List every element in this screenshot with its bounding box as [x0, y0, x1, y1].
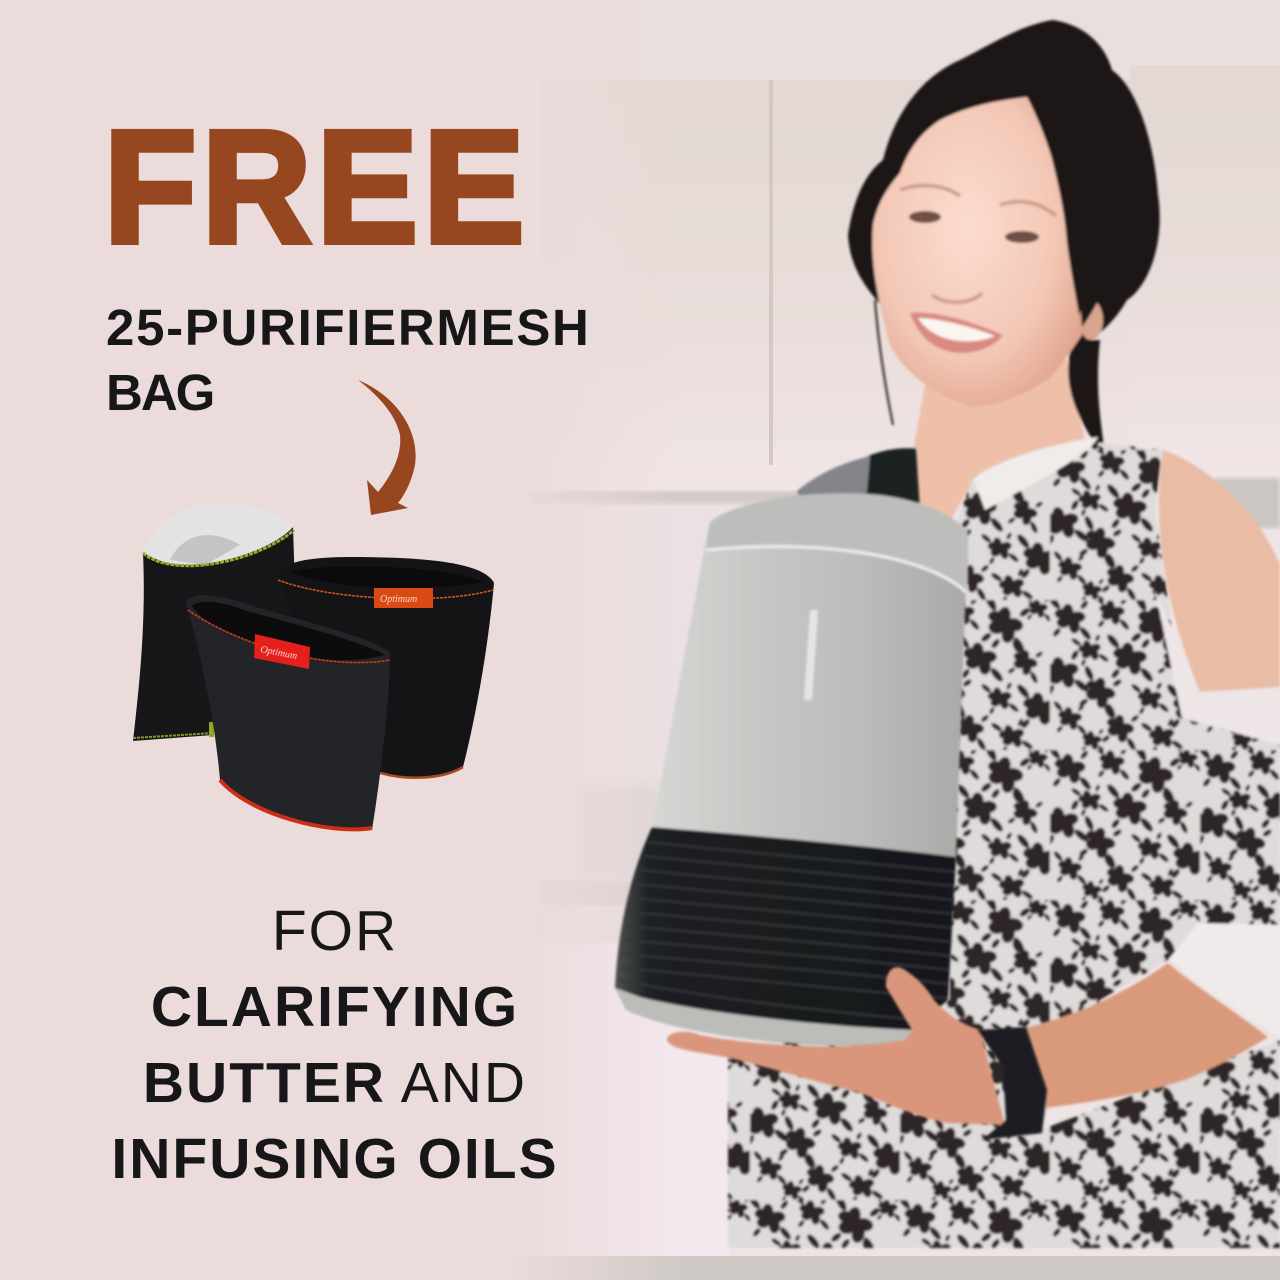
face: [872, 97, 1082, 407]
hair back: [848, 20, 1160, 350]
ribs: [618, 842, 955, 1020]
lid: [706, 493, 968, 592]
base bottom: [615, 988, 912, 1047]
side fringe: [1027, 97, 1115, 327]
subheading: product name: BAG: [106, 364, 213, 421]
subheading: product name: 25-PURIFIERMESH: [106, 299, 591, 356]
nose: [932, 293, 982, 302]
hand and watch: [667, 967, 1047, 1140]
ribbed base: [615, 827, 956, 1030]
green-stitched bag: [133, 503, 296, 741]
front red-stitched bag: [186, 595, 390, 831]
shoulder lace: [1155, 590, 1280, 745]
loose strand left: [875, 300, 893, 425]
forearm: [1025, 963, 1268, 1108]
body: [652, 530, 968, 857]
large orange-stitched bag: Optimum: [380, 594, 417, 605]
text block: usage: INFUSING OILS: [111, 1127, 559, 1191]
large orange-stitched bag: [278, 557, 494, 778]
person: [728, 20, 1280, 1248]
ear: [1079, 300, 1103, 340]
front red-stitched bag: Optimum: [259, 644, 298, 662]
subheading: product name: [106, 299, 591, 421]
bare shoulder: [1159, 450, 1280, 692]
product: mesh bags: [132, 504, 494, 832]
title: FREE: FREE: [104, 97, 530, 276]
purifier: [615, 448, 968, 1047]
text block: usage: BUTTER AND: [143, 1051, 527, 1115]
neck: [905, 360, 1085, 530]
kitchen background: [430, 0, 1280, 1280]
shine: [804, 610, 818, 700]
eyebrows: [900, 185, 1056, 216]
arrow: pointing to mesh bags: [358, 380, 416, 515]
eyes: [909, 211, 941, 223]
neck hair: [1068, 340, 1106, 460]
text block: usage: [111, 899, 559, 1191]
text block: usage: CLARIFYING: [151, 975, 519, 1039]
sleeve cuff lace: [1168, 923, 1280, 1040]
handle: [866, 448, 920, 510]
neckline lace: [973, 437, 1098, 510]
text block: usage: FOR: [272, 899, 398, 963]
blouse body: [728, 440, 1280, 1248]
mouth: [910, 313, 1003, 353]
